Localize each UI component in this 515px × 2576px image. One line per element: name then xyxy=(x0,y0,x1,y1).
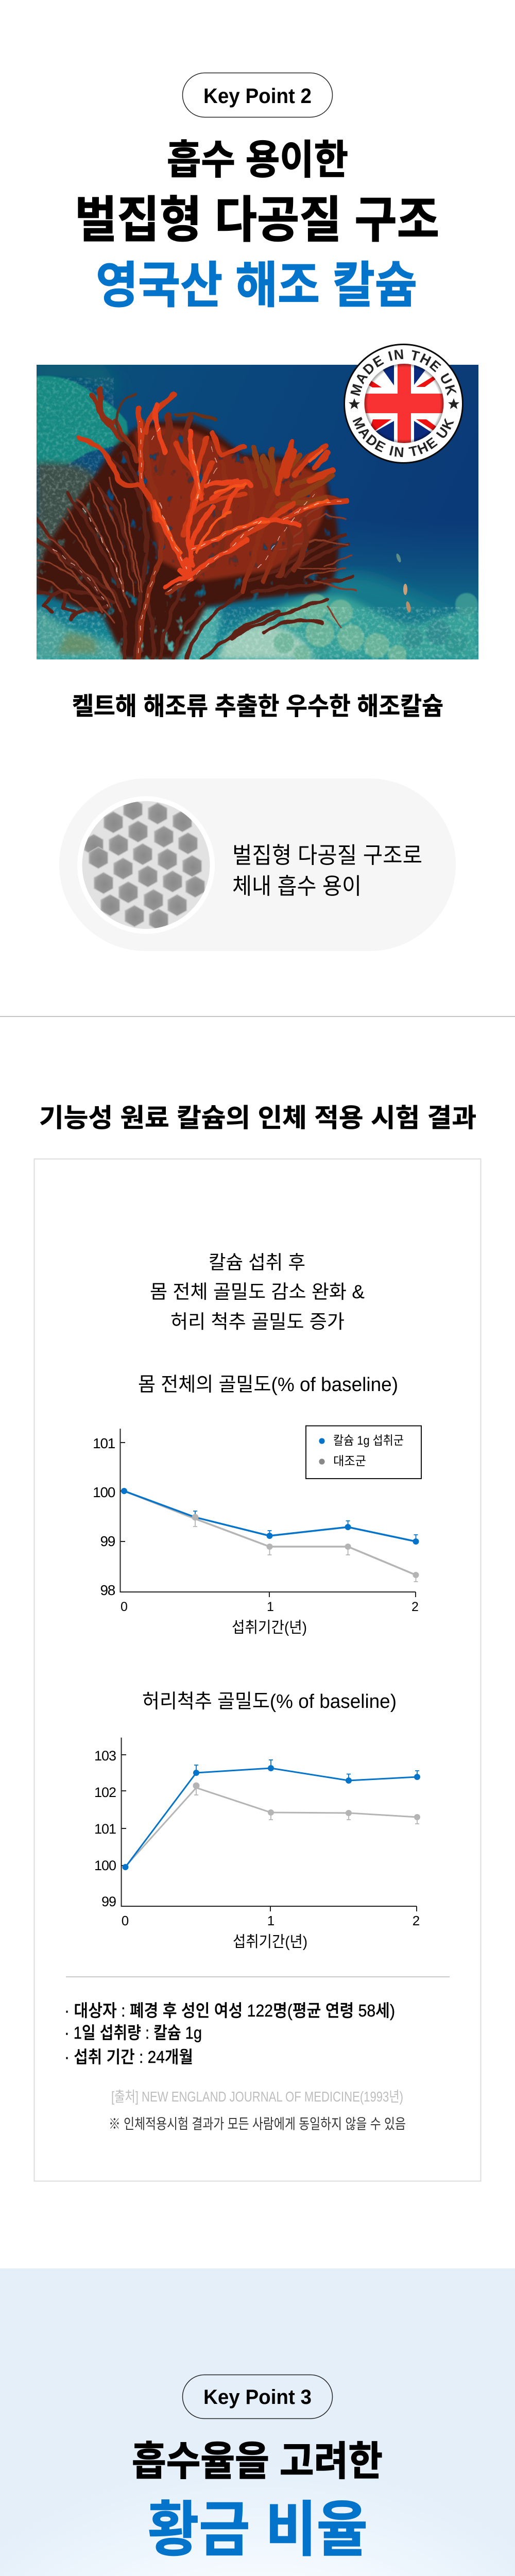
x axis title: 섭취기간(년) xyxy=(233,1934,307,1951)
callout text line 2: 체내 흡수 용이 xyxy=(232,874,362,899)
title highlight: 황금 비율 xyxy=(148,2496,368,2563)
legend: 칼슘 1g 섭취군 xyxy=(333,1434,404,1448)
seaweed mass xyxy=(37,420,338,659)
line chart: whole body bone density: 100 xyxy=(93,1484,115,1500)
x axis title: 섭취기간(년) xyxy=(232,1619,307,1636)
title: 흡수율을 고려한 xyxy=(132,2438,383,2484)
line chart: whole body bone density xyxy=(93,1426,421,1636)
line chart: whole body bone density: 0 xyxy=(121,1600,128,1614)
red-brown stems xyxy=(92,389,347,659)
badge: made in the UK xyxy=(344,344,464,464)
disclaimer: ※ 인체적용시험 결과가 모든 사람에게 동일하지 않을 수 있음 xyxy=(109,2116,406,2132)
control series xyxy=(126,1786,419,1867)
study details list: · 대상자 : 폐경 후 성인 여성 122명(평균 연령 58세) xyxy=(64,2001,395,2020)
photo: red seaweed underwater xyxy=(37,365,478,664)
calcium series xyxy=(126,1760,419,1867)
line chart: whole body bone density: 2 xyxy=(411,1600,419,1614)
dark brown strands xyxy=(37,452,352,659)
badge text top: MADE IN THE UK xyxy=(350,349,456,396)
badge text bottom: MADE IN THE UK xyxy=(352,417,454,457)
line chart: whole body bone density: 98 xyxy=(100,1582,115,1598)
legend: 대조군 xyxy=(333,1454,366,1468)
union jack flag xyxy=(365,364,444,443)
panel: honeycomb callout xyxy=(59,778,456,951)
badge: key point 3: Key Point 3 xyxy=(203,2386,312,2409)
title line 3: 영국산 해조 칼슘 xyxy=(96,258,417,313)
line chart: whole body bone density: 101 xyxy=(93,1435,115,1451)
section heading: clinical test: 기능성 원료 칼슘의 인체 적용 시험 결과 xyxy=(39,1104,476,1132)
card intro text: 몸 전체 골밀도 감소 완화 & xyxy=(150,1281,365,1302)
caption: celtic sea: 켈트해 해조류 추출한 우수한 해조칼슘 xyxy=(72,693,443,720)
line chart: whole body bone density: 1 xyxy=(267,1600,274,1614)
badge: key point 3 xyxy=(182,2375,333,2418)
chart title: lumbar spine: 허리척추 골밀도(% of baseline) xyxy=(142,1691,397,1713)
line chart: lumbar spine bone density: 102 xyxy=(94,1785,116,1800)
line chart: lumbar spine bone density xyxy=(94,1738,420,1951)
line chart: lumbar spine bone density: 1 xyxy=(267,1913,274,1928)
control series xyxy=(124,1491,418,1582)
study details list xyxy=(64,2001,395,2066)
panel: clinical trial card xyxy=(34,1159,481,2181)
divider xyxy=(0,1016,515,1017)
highlights xyxy=(52,421,343,653)
title line 1: 흡수 용이한 xyxy=(167,137,348,182)
line chart: whole body bone density: 99 xyxy=(100,1533,115,1549)
badge: key point 2 xyxy=(182,73,333,117)
badge stars xyxy=(349,398,459,409)
line chart: lumbar spine bone density: 99 xyxy=(101,1894,116,1909)
card frame xyxy=(34,1159,481,2181)
study details list: · 섭취 기간 : 24개월 xyxy=(64,2047,193,2066)
line chart: lumbar spine bone density: 103 xyxy=(94,1748,116,1764)
section background xyxy=(0,2268,515,2576)
badge ring xyxy=(344,344,462,463)
line chart: lumbar spine bone density: 0 xyxy=(122,1913,129,1928)
panel: key point 3 xyxy=(0,2268,515,2576)
chart title: whole body: 몸 전체의 골밀도(% of baseline) xyxy=(138,1374,398,1396)
line chart: lumbar spine bone density: 2 xyxy=(413,1913,420,1928)
card intro text xyxy=(150,1252,365,1332)
honeycomb image xyxy=(77,796,216,935)
fish xyxy=(397,553,401,563)
card intro text: 칼슘 섭취 후 xyxy=(209,1252,305,1273)
legend xyxy=(306,1426,421,1479)
callout background xyxy=(59,778,456,951)
callout text line 1: 벌집형 다공질 구조로 xyxy=(232,843,422,868)
study details list: · 1일 섭취량 : 칼슘 1g xyxy=(64,2023,202,2042)
bright red fronds xyxy=(79,394,347,545)
card intro text: 허리 척추 골밀도 증가 xyxy=(170,1311,345,1332)
line chart: lumbar spine bone density: 100 xyxy=(94,1858,116,1873)
section: key point 2 heading xyxy=(75,73,439,313)
title line 2: 벌집형 다공질 구조 xyxy=(75,193,439,248)
source note: [출처] NEW ENGLAND JOURNAL OF MEDICINE(1993년) xyxy=(111,2089,403,2105)
inner divider xyxy=(66,1976,450,1977)
line chart: lumbar spine bone density: 101 xyxy=(94,1821,116,1837)
calcium series xyxy=(124,1491,418,1541)
badge: key point 2: Key Point 2 xyxy=(203,84,312,108)
